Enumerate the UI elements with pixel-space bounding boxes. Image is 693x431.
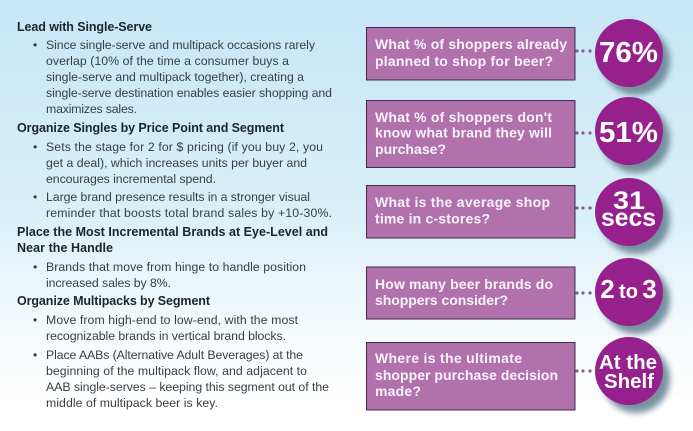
question box: purchase decision (366, 342, 575, 410)
question box: purchase decision: shopper purchase decision (375, 367, 558, 383)
text block: pricing tip: encourages incremental spend. (46, 172, 216, 186)
answer circle: 31 secs: 31 (613, 187, 645, 215)
answer circle: 31 secs (595, 178, 670, 254)
text block: brand presence tip (33, 190, 332, 220)
text block: handle position tip: Brands that move from hinge to handle position (46, 260, 306, 274)
text block: single-serve tip: Since single-serve and multipack occasions rarely (46, 38, 316, 52)
answer circle: 2 to 3 (595, 258, 670, 334)
connector dots (575, 369, 592, 373)
text block: handle position tip: increased sales by 8%. (46, 276, 171, 290)
question box: brand unknown: know what brand they will (375, 124, 552, 140)
answer circle: At the Shelf: At the (599, 351, 657, 374)
question box: planned to shop: planned to shop for beer? (375, 53, 553, 69)
answer circle: 2 to 3: to (619, 281, 638, 303)
panel: question 1 (366, 19, 670, 95)
text block: AAB placement tip: middle of multipack beer is key. (46, 396, 218, 410)
panel: question 2 (366, 97, 670, 173)
question box: brands considered: shoppers consider? (375, 292, 508, 308)
answer circle: 51% (595, 97, 670, 173)
question box: purchase decision: Where is the ultimate (375, 350, 522, 366)
heading: Organize Singles: Organize Singles by Price Point and Segment (17, 121, 285, 135)
text block: pricing tip (33, 140, 323, 186)
text block: AAB placement tip: beginning of the multipack flow, and adjacent to (46, 364, 307, 378)
text block: AAB placement tip (33, 348, 329, 410)
text block: handle position tip: • (33, 260, 37, 274)
panel: question 3 (366, 178, 670, 254)
text block: high-end to low-end tip (33, 313, 299, 343)
question box: average shop time: What is the average shop (375, 194, 550, 210)
text block: brand presence tip: • (33, 190, 37, 204)
answer circle: 76% (595, 19, 670, 95)
text block: brand presence tip: reminder that boosts total brand sales by +10-30%. (46, 206, 332, 220)
text block: single-serve tip: overlap (10% of the time a consumer buys a (46, 54, 289, 68)
text block: AAB placement tip: • (33, 348, 37, 362)
text block: AAB placement tip: AAB single-serves – keeping this segment out of the (46, 380, 329, 394)
question box: brands considered (366, 267, 575, 319)
answer circle: 2 to 3: 2 (600, 274, 615, 304)
text block: pricing tip: • (33, 140, 37, 154)
question box: average shop time: time in c-stores? (375, 210, 490, 226)
panel: merchandising tips (17, 20, 332, 410)
question box: average shop time (366, 186, 575, 238)
answer circle: 76%: 76% (599, 37, 658, 69)
text block: high-end to low-end tip: Move from high-end to low-end, with the most (46, 313, 299, 327)
panel: question 5 (366, 337, 670, 413)
question box: purchase decision: made? (375, 383, 421, 399)
text block: single-serve tip: • (33, 38, 37, 52)
question box: brand unknown: What % of shoppers don't (375, 109, 552, 125)
heading: Place the Most Incremental Brands: Place the Most Incremental Brands at Eye-Level and (17, 225, 328, 239)
heading: Place the Most Incremental Brands: Near the Handle (17, 241, 113, 255)
text block: pricing tip: get a deal), which increases units per buyer and (46, 156, 307, 170)
panel: question 4 (366, 258, 670, 334)
text block: handle position tip (33, 260, 306, 290)
answer circle: 31 secs: secs (601, 204, 656, 232)
text block: single-serve tip: maximizes sales. (46, 102, 137, 116)
text block: brand presence tip: Large brand presence results in a stronger visual (46, 190, 310, 204)
text block: single-serve tip: single-serve destination enables easier shopping and (46, 86, 332, 100)
text block: high-end to low-end tip: recognizable brands in vertical brand blocks. (46, 329, 286, 343)
heading: Place the Most Incremental Brands (17, 225, 328, 255)
connector dots (575, 49, 592, 53)
heading: Organize Multipacks: Organize Multipacks by Segment (17, 294, 211, 308)
connector dots (575, 206, 592, 210)
answer circle: At the Shelf (595, 337, 670, 413)
text block: single-serve tip (33, 38, 332, 116)
answer circle: 2 to 3: 3 (642, 274, 657, 304)
connector dots (575, 291, 592, 295)
question box: planned to shop (366, 28, 575, 80)
answer circle: 51%: 51% (599, 117, 658, 149)
answer circle: At the Shelf: Shelf (604, 370, 654, 393)
heading: Lead with Single-Serve: Lead with Single-Serve (17, 20, 152, 34)
question box: brand unknown: purchase? (375, 141, 446, 157)
question box: brands considered: How many beer brands do (375, 276, 553, 292)
connector dots (575, 131, 592, 135)
text block: AAB placement tip: Place AABs (Alternative Adult Beverages) at the (46, 348, 303, 362)
text block: single-serve tip: single-serve and multipack together), creating a (46, 70, 304, 84)
question box: brand unknown (366, 100, 575, 168)
text block: high-end to low-end tip: • (33, 313, 37, 327)
question box: planned to shop: What % of shoppers already (375, 36, 567, 52)
text block: pricing tip: Sets the stage for 2 for $ pricing (if you buy 2, you (46, 140, 323, 154)
